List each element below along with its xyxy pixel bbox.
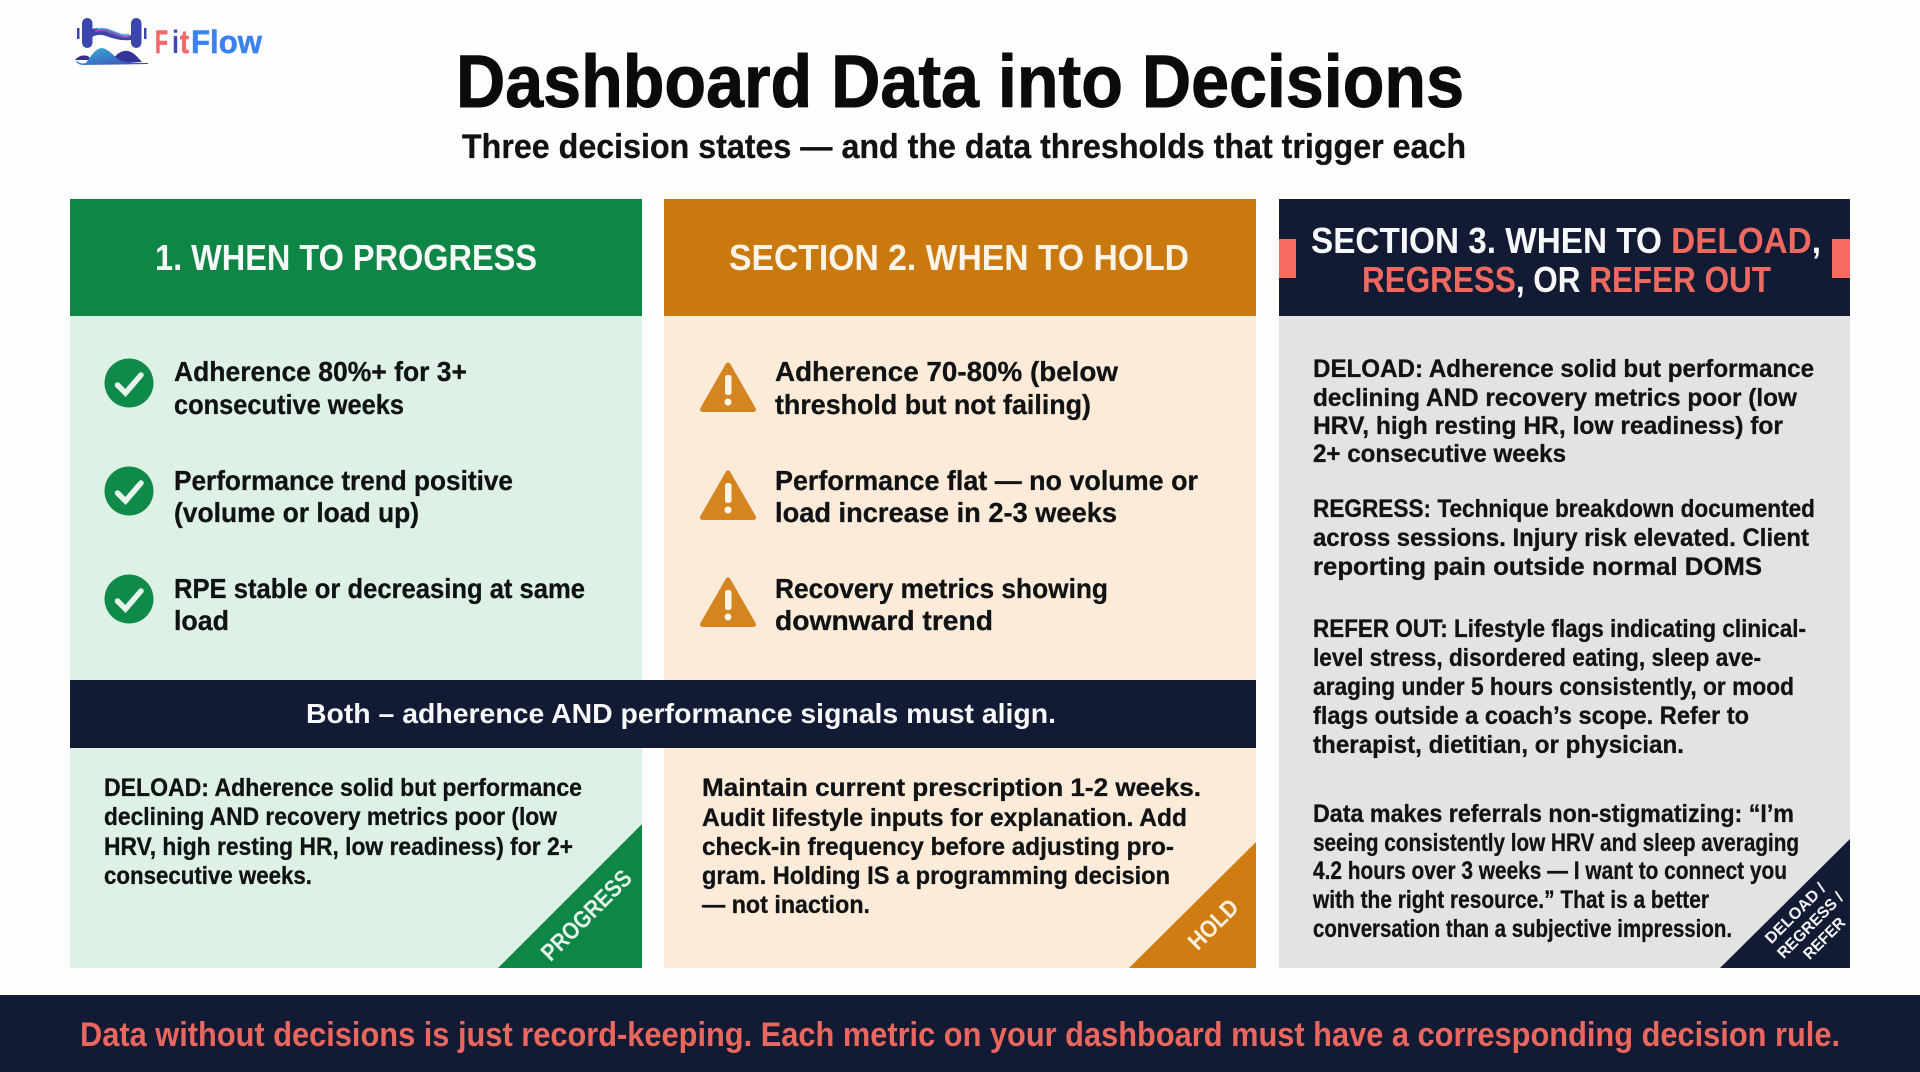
panel header: progress: 1. WHEN TO PROGRESS <box>155 237 537 278</box>
banner: both signals must align: Both – adherence AND performance signals must align. <box>306 698 1056 729</box>
text: hold action: Audit lifestyle inputs for explanation. Add <box>702 804 1187 832</box>
text: deload: HRV, high resting HR, low readiness) for <box>1313 412 1783 440</box>
icon: dumbbell and wave <box>75 18 148 65</box>
corner tag: hold <box>1129 842 1256 968</box>
text: progress action <box>104 774 582 890</box>
criterion: RPE: load <box>174 605 229 636</box>
text: refer out: araging under 5 hours consistently, or mood <box>1313 673 1794 701</box>
panel: when to progress <box>70 199 642 968</box>
criterion: performance flat <box>775 465 1198 528</box>
text: data makes referrals non-stigmatizing: Data makes referrals non-stigmatizing: “I’m <box>1313 800 1794 828</box>
text: refer out <box>1313 615 1806 759</box>
icon: warning 3 <box>702 580 754 624</box>
text: deload <box>1313 355 1814 468</box>
text: data makes referrals non-stigmatizing: seeing consistently low HRV and sleep averaging <box>1313 829 1799 857</box>
text: deload: DELOAD: Adherence solid but performance <box>1313 355 1814 383</box>
criterion: adherence <box>775 356 1118 420</box>
text: progress action: declining AND recovery metrics poor (low <box>104 803 557 831</box>
text: hold action: gram. Holding IS a programming decision <box>702 862 1170 890</box>
text: progress action: consecutive weeks. <box>104 862 312 890</box>
text: progress action: DELOAD: Adherence solid but performance <box>104 774 582 802</box>
panel: when to hold <box>664 199 1256 968</box>
wordmark <box>155 24 262 60</box>
corner tag: progress: PROGRESS <box>536 865 638 967</box>
text: regress: REGRESS: Technique breakdown documented <box>1313 495 1815 523</box>
logo: FitFlow <box>75 18 262 65</box>
text: hold action: — not inaction. <box>702 891 870 919</box>
criterion: recovery: Recovery metrics showing <box>775 573 1108 604</box>
panel: when to deload, regress, or refer out <box>1279 199 1850 968</box>
text: deload: 2+ consecutive weeks <box>1313 440 1566 468</box>
panel header: deload <box>1279 199 1850 316</box>
wordmark: F <box>155 24 168 60</box>
criterion: adherence: Adherence 80%+ for 3+ <box>174 356 467 387</box>
text: hold action: Maintain current prescription 1-2 weeks. <box>702 774 1201 802</box>
footer banner <box>0 995 1920 1072</box>
subtitle: Three decision states — and the data thresholds that trigger each <box>462 128 1466 166</box>
criterion: performance <box>174 465 513 528</box>
text: refer out: therapist, dietitian, or physician. <box>1313 731 1684 759</box>
wordmark: t <box>180 24 189 60</box>
criterion: performance flat: Performance flat — no volume or <box>775 465 1198 496</box>
icon: check 2 <box>104 466 154 516</box>
text: data makes referrals non-stigmatizing: 4.2 hours over 3 weeks — I want to connect you <box>1313 857 1787 885</box>
wordmark: i <box>172 24 179 60</box>
criterion: recovery: downward trend <box>775 605 993 636</box>
panel header: hold <box>664 199 1256 316</box>
panel header: hold: SECTION 2. WHEN TO HOLD <box>729 237 1189 278</box>
text: regress: across sessions. Injury risk elevated. Client <box>1313 524 1810 552</box>
criterion: recovery <box>775 573 1108 636</box>
panel header: deload: SECTION 3. WHEN TO DELOAD, <box>1311 220 1821 261</box>
corner tag: hold: HOLD <box>1183 894 1244 955</box>
criterion: performance: (volume or load up) <box>174 497 419 528</box>
text: hold action <box>702 774 1201 919</box>
corner tag: deload / regress / refer: REFER <box>1800 914 1850 963</box>
icon: warning 2 <box>702 473 754 518</box>
text: data makes referrals non-stigmatizing: conversation than a subjective impression. <box>1313 915 1732 943</box>
icon: check 3 <box>104 574 154 624</box>
corner tag: deload / regress / refer <box>1720 839 1850 968</box>
wordmark: Flow <box>191 24 262 60</box>
banner: both signals must align <box>70 680 1256 748</box>
corner tag: progress <box>498 824 642 968</box>
icon: warning 1 <box>702 365 754 410</box>
text: refer out: level stress, disordered eating, sleep ave- <box>1313 644 1761 672</box>
criterion: adherence: Adherence 70-80% (below <box>775 356 1118 387</box>
panel header: progress <box>70 199 642 316</box>
corner tag: deload / regress / refer: DELOAD / <box>1762 880 1830 947</box>
text: regress <box>1313 495 1815 581</box>
criterion: adherence: threshold but not failing) <box>775 389 1091 420</box>
text: regress: reporting pain outside normal DOMS <box>1313 553 1762 581</box>
criterion: performance flat: load increase in 2-3 weeks <box>775 497 1117 528</box>
criterion: RPE: RPE stable or decreasing at same <box>174 573 585 604</box>
panel header: deload: REGRESS, OR REFER OUT <box>1362 259 1771 300</box>
title: Dashboard Data into Decisions <box>456 40 1464 123</box>
icon: check 1 <box>104 358 154 408</box>
text: data makes referrals non-stigmatizing <box>1312 800 1799 943</box>
text: data makes referrals non-stigmatizing: with the right resource.” That is a better <box>1312 886 1709 914</box>
criterion: adherence: consecutive weeks <box>174 389 404 420</box>
text: hold action: check-in frequency before adjusting pro- <box>702 833 1174 861</box>
text: refer out: REFER OUT: Lifestyle flags indicating clinical- <box>1313 615 1806 643</box>
criterion: performance: Performance trend positive <box>174 465 513 496</box>
criterion: RPE <box>174 573 585 636</box>
corner tag: deload / regress / refer: REGRESS / <box>1774 889 1848 962</box>
criterion: adherence <box>174 356 467 420</box>
text: refer out: flags outside a coach’s scope. Refer to <box>1313 702 1749 730</box>
text: progress action: HRV, high resting HR, low readiness) for 2+ <box>104 833 573 861</box>
text: deload: declining AND recovery metrics poor (low <box>1313 384 1798 412</box>
